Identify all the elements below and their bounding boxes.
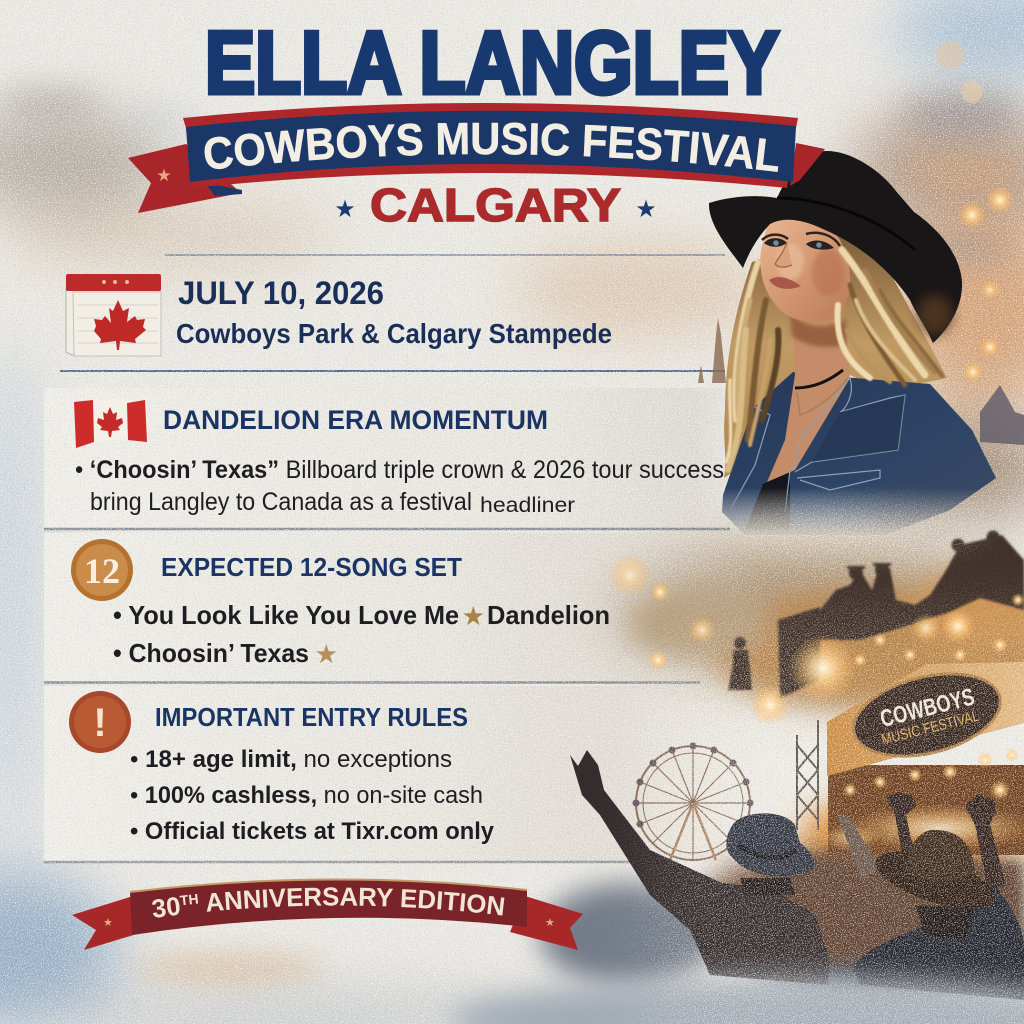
Calgary heading: ★ [635, 196, 657, 223]
ribbon centre [130, 879, 527, 935]
distant crowd silhouettes [728, 530, 1024, 698]
hat speckle glow [917, 295, 953, 335]
title: ELLA LANGLEY [205, 13, 779, 112]
momentum description: • ‘Choosin’ Texas” Billboard triple crown & 2026 tour success [75, 456, 724, 484]
set list songs: • You Look Like You Love Me [113, 600, 459, 630]
rules list: • 100% cashless, no on-site cash [130, 782, 483, 809]
bokeh lights [936, 41, 1014, 382]
festival banner [128, 103, 825, 213]
momentum description: headliner [480, 494, 575, 517]
festival sign [845, 660, 1009, 770]
set list heading: EXPECTED 12-SONG SET [161, 552, 462, 582]
black cowboy hat [709, 151, 962, 343]
crowd mass [760, 854, 1024, 965]
icon: number 12 badge: 12 [84, 551, 120, 591]
banner left tail [128, 144, 241, 213]
momentum heading: DANDELION ERA MOMENTUM [163, 405, 548, 435]
date text [176, 275, 612, 349]
jacket collar and pocket [730, 378, 905, 530]
light tower [797, 720, 818, 830]
jacket base speckle [722, 484, 1000, 575]
choker and necklace [795, 370, 848, 415]
panel: expected set list [44, 533, 764, 682]
icon: number 12 badge [71, 539, 133, 601]
scene speckle [608, 568, 1024, 1024]
set list songs: ★ [463, 603, 484, 629]
warm glow behind scene [540, 570, 1024, 991]
cowboy left [570, 750, 830, 985]
icon: calendar with maple leaf [66, 274, 161, 356]
jacket shading [812, 395, 905, 462]
rules list: • Official tickets at Tixr.com only [130, 818, 495, 845]
neck and chest [767, 312, 850, 482]
icon: Canadian flag [74, 399, 147, 448]
ribbon stars: ★ [545, 917, 555, 929]
festival sign: MUSIC FESTIVAL [880, 708, 981, 748]
neck shadow [790, 312, 846, 347]
panel: Dandelion era momentum [44, 388, 744, 529]
banner text: COWBOYS MUSIC FESTIVAL [204, 122, 778, 172]
momentum description [75, 456, 724, 517]
face [760, 219, 850, 322]
Calgary heading: ★ [334, 196, 356, 223]
foreground haze [450, 978, 1024, 1024]
rules list: • 18+ age limit, no exceptions [130, 746, 452, 773]
date text: JULY 10, 2026 [178, 275, 384, 311]
banner navy band [186, 111, 796, 182]
banner left tail fold [205, 183, 242, 196]
anniversary ribbon [72, 878, 583, 950]
stage underside [828, 765, 1024, 855]
lights [608, 553, 1024, 852]
rule below date block [60, 370, 725, 372]
icon: exclamation badge: ! [93, 701, 107, 745]
ribbon stars [103, 917, 555, 929]
ribbon stars: ★ [103, 917, 113, 929]
ribbon text: ANNIVERSARY EDITION [206, 887, 504, 916]
cowboy right [853, 830, 1024, 1000]
ribbon right tail [510, 896, 583, 950]
rule above date block [165, 254, 725, 256]
eyes, nose and lips [762, 233, 840, 289]
banner left tail star: ★ [156, 166, 172, 185]
festival sign: COWBOYS [878, 683, 977, 733]
date text: Cowboys Park & Calgary Stampede [176, 318, 612, 349]
rules list [130, 746, 495, 845]
banner red band [183, 103, 798, 188]
stage roof [827, 662, 1024, 776]
hair back [724, 232, 947, 478]
momentum description: bring Langley to Canada as a festival [90, 488, 472, 516]
set list songs [113, 600, 610, 668]
ribbon left tail [72, 897, 150, 950]
hat band shading [777, 198, 915, 250]
set list songs: ★ [316, 641, 337, 667]
ribbon text: TH [180, 894, 198, 906]
Calgary heading: CALGARY [370, 179, 621, 231]
set list songs: • Choosin’ Texas [113, 638, 309, 668]
dark top [745, 470, 790, 530]
distant castle towers [698, 318, 1024, 445]
festival scene [442, 529, 1024, 1024]
raised arms of crowd [836, 792, 1006, 890]
rules heading: IMPORTANT ENTRY RULES [155, 702, 468, 732]
ribbon text: 30 [152, 897, 180, 918]
Calgary heading [334, 179, 657, 231]
portrait of Ella Langley [698, 41, 1024, 575]
jacket [722, 372, 996, 535]
Ferris wheel [632, 742, 754, 860]
hair strands [726, 250, 942, 470]
ribbon edge highlights [130, 879, 527, 892]
face shading [776, 244, 844, 296]
banner right tail [790, 143, 825, 186]
icon: exclamation badge [69, 691, 131, 753]
panel: entry rules [44, 686, 764, 862]
set list songs: Dandelion [487, 600, 610, 630]
